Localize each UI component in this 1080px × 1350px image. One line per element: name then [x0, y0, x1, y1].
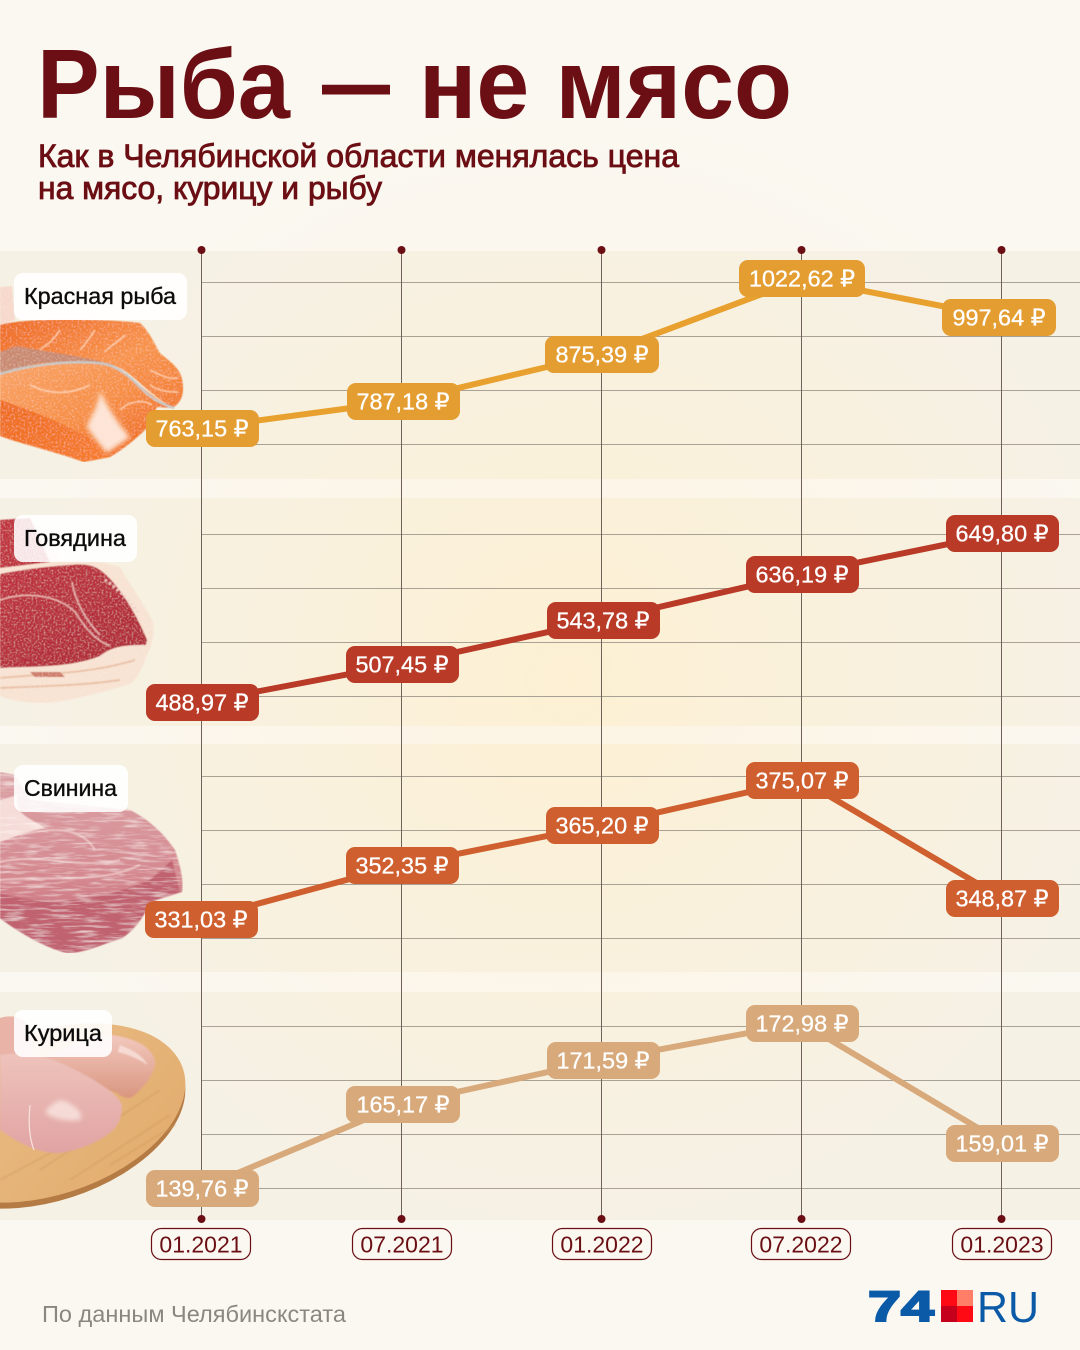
image: salmon steaks [0, 286, 183, 462]
value pills: red fish: 787,18 ₽ [357, 388, 450, 414]
logo: 74.ru: RU [977, 1283, 1039, 1332]
x axis dates: 07.2021 [360, 1232, 444, 1258]
image: chicken on wooden board [0, 991, 208, 1241]
axis dots [198, 246, 1006, 1223]
value pills: chicken: 165,17 ₽ [357, 1092, 450, 1118]
line: pork price [201, 780, 1002, 919]
value pills: beef: 507,45 ₽ [356, 652, 449, 678]
x axis dates: 07.2022 [759, 1232, 843, 1258]
logo: 74.ru: 74 [868, 1283, 934, 1331]
value pills: red fish: 1022,62 ₽ [749, 266, 855, 292]
vertical time axes [202, 250, 1002, 1219]
label: Курица [14, 1010, 112, 1057]
x axis dates: 01.2023 [960, 1232, 1044, 1258]
value pills: beef: 543,78 ₽ [557, 608, 650, 634]
value pills: red fish [146, 260, 1056, 447]
x axis dates [152, 1228, 1052, 1260]
line: chicken price [202, 1023, 1003, 1188]
value pills: red fish: 763,15 ₽ [156, 416, 249, 442]
label: Курица: Курица [24, 1020, 102, 1046]
value pills: chicken: 172,98 ₽ [756, 1010, 849, 1036]
value pills: chicken: 171,59 ₽ [557, 1048, 650, 1074]
panel: beef [0, 498, 1080, 726]
value pills: chicken: 139,76 ₽ [156, 1176, 249, 1202]
subtitle: Как в Челябинской области менялась цена [38, 138, 679, 174]
line: red fish price [202, 279, 999, 428]
value pills: beef: 649,80 ₽ [956, 520, 1049, 546]
label: Свинина [14, 765, 128, 812]
value pills: pork: 331,03 ₽ [155, 906, 248, 932]
image: beef cut [0, 518, 154, 703]
title: Рыба [37, 29, 291, 139]
subtitle [38, 138, 679, 206]
panel: chicken [0, 991, 1080, 1241]
label: Говядина [14, 515, 137, 562]
value pills: red fish: 997,64 ₽ [953, 304, 1046, 330]
value pills: pork: 352,35 ₽ [356, 852, 449, 878]
title: не мясо [419, 29, 792, 139]
value pills: pork: 375,07 ₽ [756, 768, 849, 794]
subtitle: на мясо, курицу и рыбу [38, 170, 382, 206]
value pills: chicken [146, 1005, 1059, 1207]
value pills: beef: 488,97 ₽ [156, 690, 249, 716]
value pills: beef [146, 515, 1059, 721]
label: Красная рыба: Красная рыба [24, 283, 176, 309]
source note: По данным Челябинскстата [42, 1301, 346, 1327]
value pills: pork: 365,20 ₽ [556, 812, 649, 838]
logo: 74.ru [868, 1283, 1039, 1332]
image: pork cut [0, 772, 183, 953]
x axis dates: 01.2021 [159, 1232, 243, 1258]
panel: red fish [0, 251, 1080, 479]
title: — [322, 27, 390, 137]
label: Говядина: Говядина [24, 525, 126, 551]
value pills: chicken: 159,01 ₽ [956, 1130, 1049, 1156]
label: Красная рыба [14, 273, 187, 320]
value pills: pork: 348,87 ₽ [956, 886, 1049, 912]
value pills: beef: 636,19 ₽ [756, 562, 849, 588]
x axis dates: 01.2022 [560, 1232, 644, 1258]
value pills: red fish: 875,39 ₽ [556, 342, 649, 368]
line: beef price [202, 533, 1002, 702]
title [37, 27, 792, 139]
value pills: pork [145, 762, 1059, 938]
label: Свинина: Свинина [24, 775, 117, 801]
panel: pork [0, 744, 1080, 972]
